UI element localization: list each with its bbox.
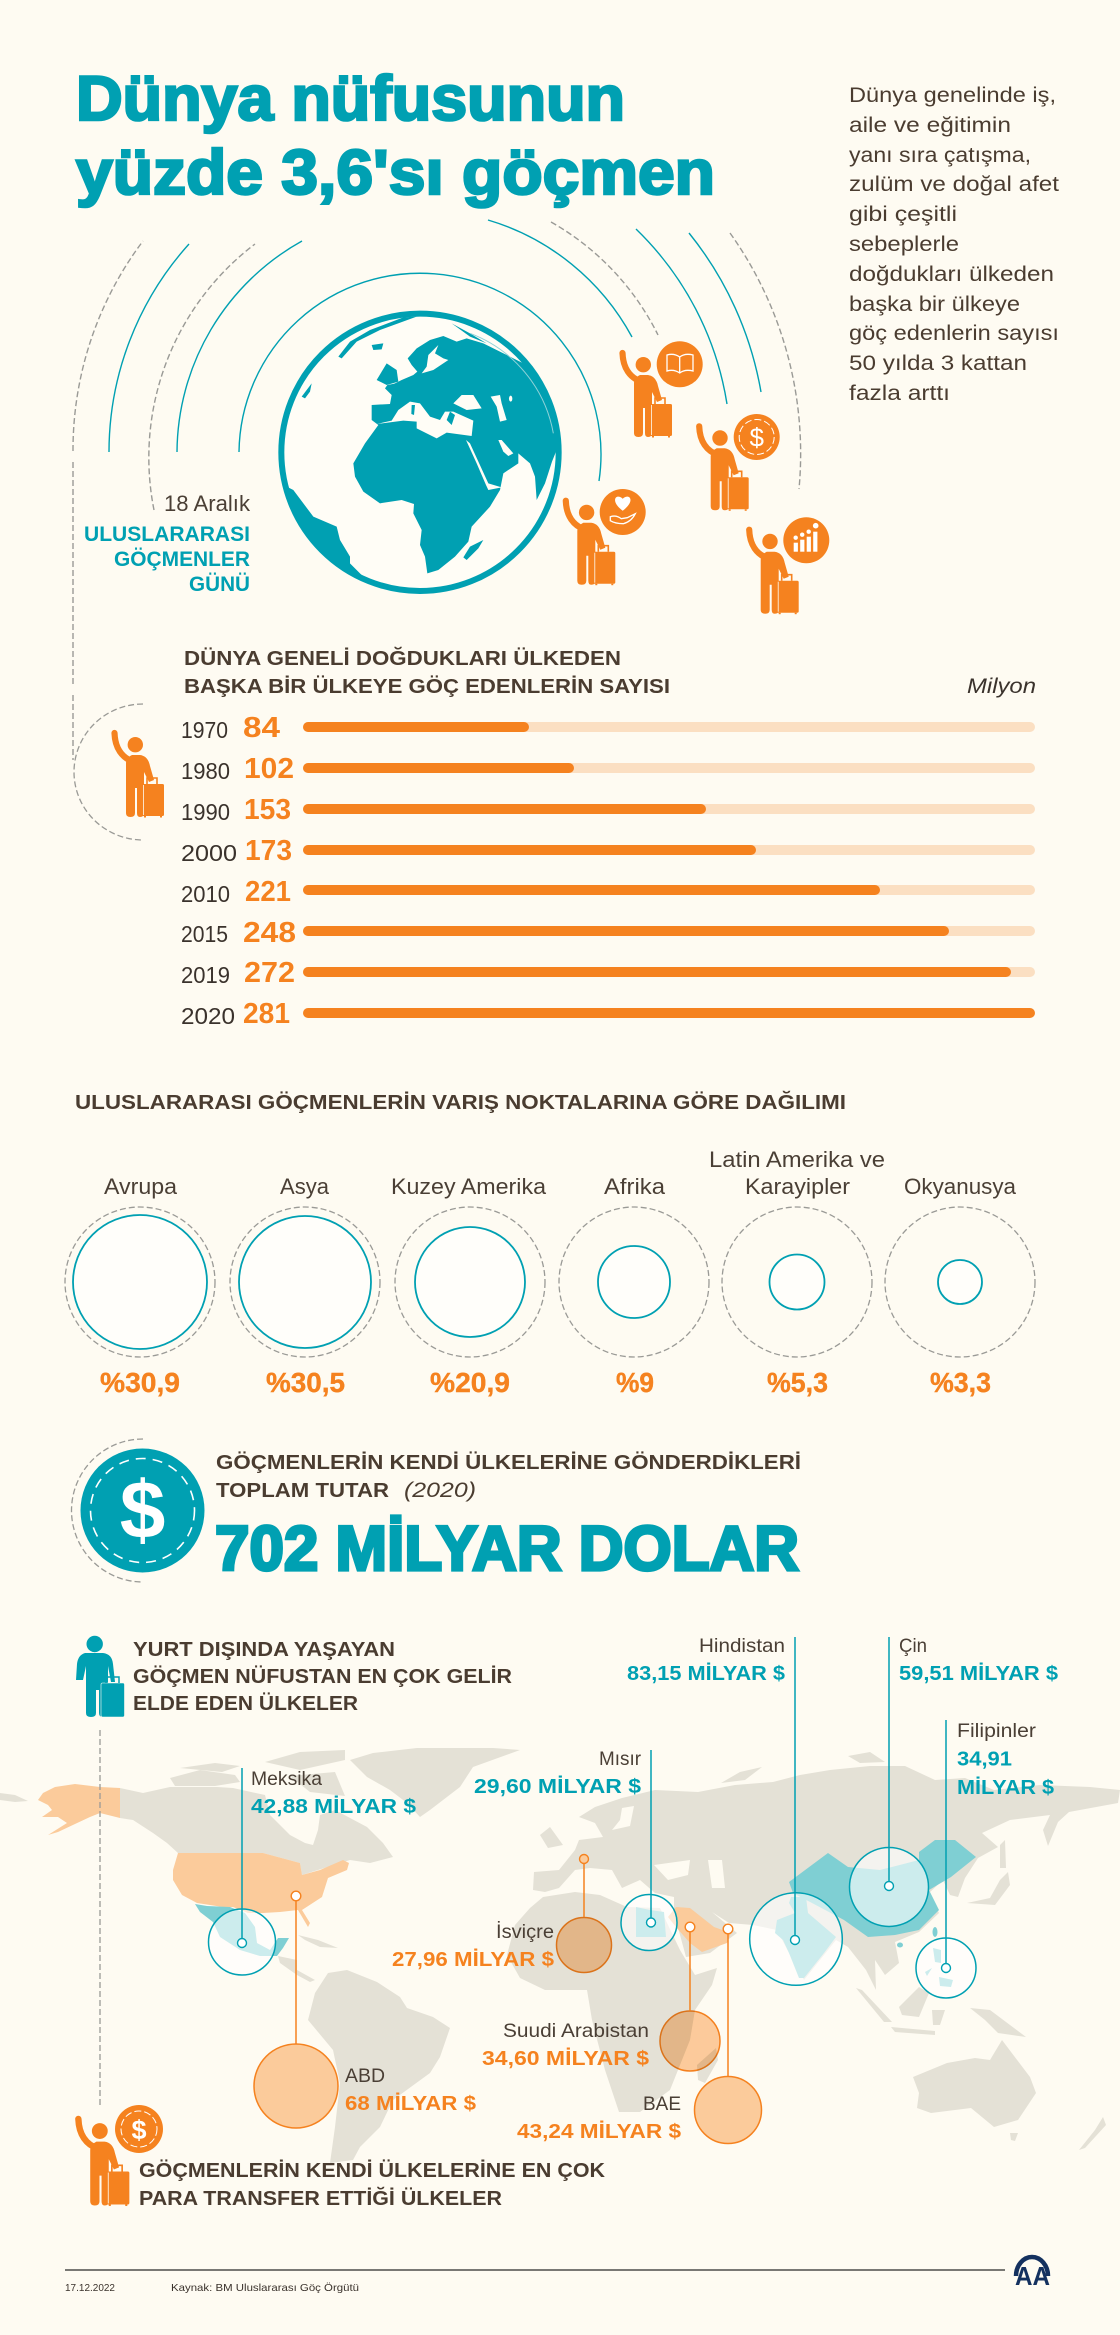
circle: Okyanusya: %3,3 xyxy=(930,1367,991,1398)
circle: Asya: %30,5 xyxy=(266,1367,345,1398)
circle: Asya xyxy=(230,1174,380,1398)
callout: Çin xyxy=(850,1635,1059,1926)
legend: top senders: GÖÇMENLERİN KENDİ ÜLKELERİNE EN ÇOK xyxy=(139,2159,605,2182)
callout: ABD: ABD xyxy=(345,2065,385,2087)
callout: BAE: 43,24 MİLYAR $ xyxy=(517,2120,682,2143)
callout: Meksika xyxy=(208,1768,417,1975)
intro text block: fazla arttı xyxy=(849,382,950,405)
circle: Avrupa: Avrupa xyxy=(104,1174,178,1199)
circle: Kuzey Amerika xyxy=(391,1174,547,1398)
heading: remittance total: TOPLAM TUTAR xyxy=(216,1479,389,1502)
footer xyxy=(65,2270,1005,2294)
bar 2010: 2010 xyxy=(181,881,230,907)
heading: destinations: ULUSLARARASI GÖÇMENLERİN VARIŞ NOKTALARINA GÖRE DAĞILIMI xyxy=(75,1090,846,1114)
bar 2020: 2020 xyxy=(181,1003,235,1029)
icon: migrant beside bar chart xyxy=(74,704,164,840)
panel: destination circles xyxy=(65,1147,1035,1398)
bar 1980 xyxy=(181,753,1035,785)
intro text block: başka bir ülkeye xyxy=(849,293,1020,316)
callout: Suudi Arabistan: Suudi Arabistan xyxy=(503,2020,649,2042)
circle: Kuzey Amerika: %20,9 xyxy=(430,1367,510,1398)
callout: Mısır: 29,60 MİLYAR $ xyxy=(474,1775,642,1798)
globe xyxy=(281,314,563,591)
bar 2000: 2000 xyxy=(181,840,237,866)
bar 2000: 173 xyxy=(245,835,292,867)
circle: Latin Amerika ve Karayipler: Karayipler xyxy=(745,1174,850,1199)
circle: Avrupa xyxy=(65,1174,215,1398)
title: Dünya nüfusunun xyxy=(76,64,625,134)
intro text block: göç edenlerin sayısı xyxy=(849,322,1059,345)
intro text block: yanı sıra çatışma, xyxy=(849,144,1031,167)
heading: remittance total: (2020) xyxy=(404,1479,476,1502)
heading: migrant count: DÜNYA GENELİ DOĞDUKLARI ÜLKEDEN xyxy=(184,646,621,670)
circle: Okyanusya xyxy=(885,1174,1035,1398)
callout: Hindistan: Hindistan xyxy=(699,1635,785,1657)
callout: BAE: BAE xyxy=(643,2093,681,2115)
heading: migrant count: BAŞKA BİR ÜLKEYE GÖÇ EDENLERİN SAYISI xyxy=(184,675,670,698)
circle: Avrupa: %30,9 xyxy=(100,1367,180,1398)
icon: migrant with dollar coin: $ xyxy=(749,422,764,452)
icon: orange migrant with coin xyxy=(78,2105,163,2206)
bar 2019: 2019 xyxy=(181,962,230,988)
callout: Çin: 59,51 MİLYAR $ xyxy=(899,1662,1059,1685)
bar 1970 xyxy=(181,712,1035,744)
legend: top senders xyxy=(78,2105,605,2210)
callout: İsviçre: İsviçre xyxy=(496,1920,554,1943)
callout: İsviçre: 27,96 MİLYAR $ xyxy=(392,1948,555,1971)
bar 2015: 248 xyxy=(243,917,296,949)
callout: Meksika: Meksika xyxy=(251,1768,322,1790)
circle: Afrika: %9 xyxy=(616,1367,654,1398)
callout: Suudi Arabistan: 34,60 MİLYAR $ xyxy=(482,2047,650,2070)
big number: 702 milyar dolar: 702 MİLYAR DOLAR xyxy=(215,1514,799,1584)
intro text block xyxy=(849,84,1059,405)
icon: dollar coin: $ xyxy=(120,1465,165,1556)
concentric arcs around globe xyxy=(73,220,801,760)
dashed connector xyxy=(99,1730,101,2105)
bar 2019 xyxy=(181,957,1035,989)
map: USA and Saudi Arabia xyxy=(38,1784,731,1952)
circle: Afrika xyxy=(559,1174,709,1398)
title xyxy=(76,64,715,208)
callout: Filipinler: 34,91 xyxy=(957,1748,1012,1770)
legend: top earners: YURT DIŞINDA YAŞAYAN xyxy=(133,1638,395,1661)
bar 2000 xyxy=(181,835,1035,867)
circle: Asya: Asya xyxy=(280,1174,330,1199)
callout: 18 Aralık: 18 Aralık xyxy=(164,491,251,516)
icon: migrant with book xyxy=(622,341,703,438)
callout: Filipinler: Filipinler xyxy=(957,1720,1037,1742)
footer: 17.12.2022 xyxy=(65,2282,115,2294)
callout: 18 Aralık xyxy=(84,491,251,596)
intro text block: 50 yılda 3 kattan xyxy=(849,352,1027,375)
callout: Filipinler: MİLYAR $ xyxy=(957,1776,1055,1799)
callout: Suudi Arabistan xyxy=(482,1922,720,2071)
circle: Latin Amerika ve Karayipler xyxy=(709,1147,885,1398)
legend: top earners: GÖÇMEN NÜFUSTAN EN ÇOK GELİR xyxy=(133,1665,512,1688)
unit label: Milyon xyxy=(967,675,1036,698)
icon: migrant with heart in hand xyxy=(566,489,646,585)
bar 1980: 1980 xyxy=(181,758,230,784)
icon: orange migrant with coin: $ xyxy=(131,2115,147,2145)
callout: Hindistan xyxy=(627,1635,842,1985)
heading: remittance total xyxy=(216,1451,801,1502)
bar 1990 xyxy=(181,794,1035,826)
bar 1970: 84 xyxy=(243,712,280,744)
intro text block: sebeplerle xyxy=(849,233,959,256)
title: yüzde 3,6'sı göçmen xyxy=(76,138,715,208)
circle: Afrika: Afrika xyxy=(604,1174,666,1199)
bar 1990: 1990 xyxy=(181,799,230,825)
circle: Latin Amerika ve Karayipler: %5,3 xyxy=(767,1367,828,1398)
callout: Hindistan: 83,15 MİLYAR $ xyxy=(627,1662,786,1685)
icon: migrant with dollar coin xyxy=(699,414,780,511)
bar 2015 xyxy=(181,917,1035,949)
icon: dollar coin xyxy=(72,1439,205,1582)
callout: 18 Aralık: ULUSLARARASI xyxy=(84,523,250,546)
bar 2020: 281 xyxy=(243,998,290,1030)
bar 1970: 1970 xyxy=(181,717,228,743)
world map xyxy=(0,1748,1120,2163)
intro text block: aile ve eğitimin xyxy=(849,114,1011,137)
legend: top senders: PARA TRANSFER ETTİĞİ ÜLKELER xyxy=(139,2186,502,2210)
callout: 18 Aralık: GÖÇMENLER xyxy=(114,548,250,571)
bar 2019: 272 xyxy=(244,957,295,989)
callout: Mısır xyxy=(474,1748,677,1950)
circle: Latin Amerika ve Karayipler: Latin Amerika ve xyxy=(709,1147,885,1172)
intro text block: Dünya genelinde iş, xyxy=(849,84,1056,107)
bar 1990: 153 xyxy=(244,794,291,826)
bar chart xyxy=(181,712,1035,1030)
map: highlighted teal countries xyxy=(195,1840,976,1987)
bar 2015: 2015 xyxy=(181,921,228,947)
intro text block: doğdukları ülkeden xyxy=(849,263,1054,286)
callout: Filipinler xyxy=(916,1720,1055,1998)
bar 2010: 221 xyxy=(245,876,291,908)
icon: migrant with growth chart xyxy=(749,517,829,614)
footer: Kaynak: BM Uluslararası Göç Örgütü xyxy=(171,2282,359,2294)
heading: remittance total: GÖÇMENLERİN KENDİ ÜLKELERİNE GÖNDERDİKLERİ xyxy=(216,1451,801,1474)
logo: AA: AA xyxy=(1015,2261,1050,2291)
intro text block: zulüm ve doğal afet xyxy=(849,173,1059,196)
callout: ABD xyxy=(254,1891,477,2128)
icon: teal migrant xyxy=(76,1636,124,1717)
callout: ABD: 68 MİLYAR $ xyxy=(345,2092,477,2115)
circle: Okyanusya: Okyanusya xyxy=(904,1174,1017,1199)
legend: top earners: ELDE EDEN ÜLKELER xyxy=(133,1692,358,1715)
callout: BAE xyxy=(517,1924,762,2144)
callout: Meksika: 42,88 MİLYAR $ xyxy=(251,1795,417,1818)
intro text block: gibi çeşitli xyxy=(849,203,957,226)
callout: Mısır: Mısır xyxy=(599,1748,641,1770)
callout: 18 Aralık: GÜNÜ xyxy=(189,573,250,596)
bar 2010 xyxy=(181,876,1035,908)
callout: Çin: Çin xyxy=(899,1635,927,1657)
bar 1980: 102 xyxy=(244,753,294,785)
callout: İsviçre xyxy=(392,1854,612,1972)
heading: migrant count xyxy=(184,646,670,698)
circle: Kuzey Amerika: Kuzey Amerika xyxy=(391,1174,547,1199)
bar 2020 xyxy=(181,998,1035,1030)
legend: top earners xyxy=(76,1636,512,1717)
